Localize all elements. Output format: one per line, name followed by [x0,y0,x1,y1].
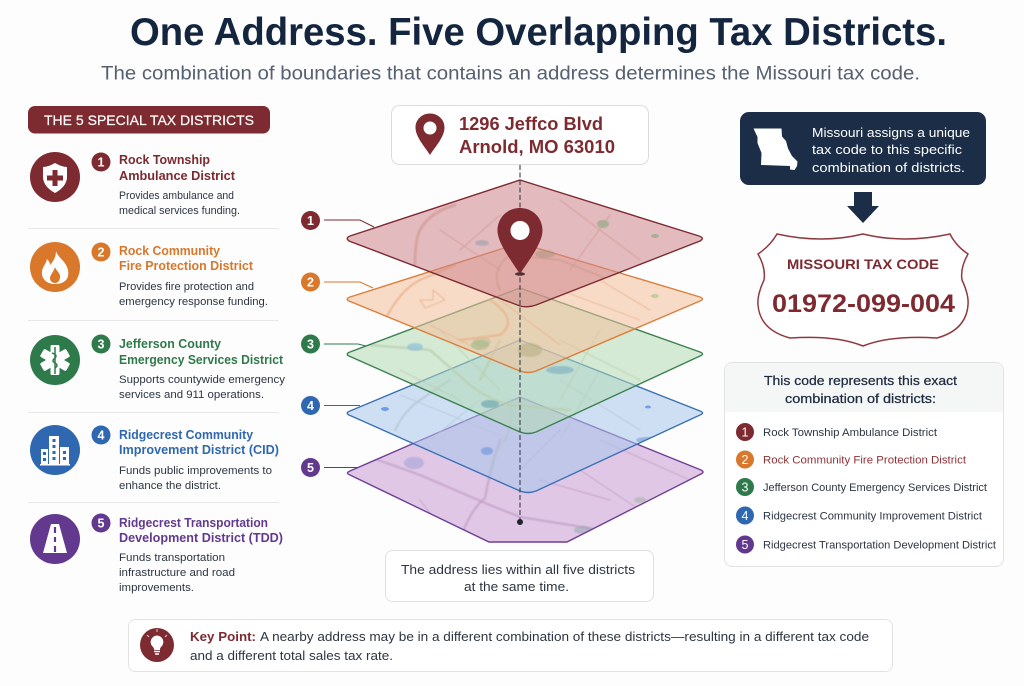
layer callout 1: 1 [307,214,314,228]
callout: Missouri assigns code: tax code to this specific [812,142,962,157]
list row 5 [736,536,996,554]
list heading: This code represents this exact [764,374,958,388]
layer 2: fire protection district [347,243,702,372]
icon: light bulb [140,628,174,662]
layer callout 4: 4 [307,399,314,413]
note: all five districts: The address lies within all five districts [401,563,635,577]
icon: Missouri outline [754,128,798,170]
subtitle: The combination of boundaries that contains an address determines the Missouri tax code. [101,62,920,84]
district 2: Rock Community [119,244,220,258]
callout: Missouri assigns code: Missouri assigns a unique [812,125,970,140]
address card [392,106,648,164]
panel: district combination list [724,362,1004,566]
key point callout [128,620,892,672]
callout: Missouri assigns code: combination of districts. [812,160,965,175]
layer callout 2 [301,272,373,292]
list row 3 [736,478,987,496]
list row 1: Rock Township Ambulance District [763,427,937,439]
tax code shield: 01972-099-004 [772,290,955,318]
panel heading [28,106,270,134]
icon: buildings [30,425,80,475]
district 1: Ambulance District [119,169,236,183]
key point callout: Key Point: [190,629,256,644]
list row 3: 3 [742,480,749,494]
district 1: Rock Township [119,153,210,167]
layer callout 1 [301,211,374,230]
district 5: 5 [98,516,105,530]
layer callout 3 [301,334,366,354]
district 2 [30,242,268,308]
district 3: 3 [98,338,105,352]
icon: fire [30,242,80,292]
layer callout 3: 3 [307,338,314,352]
district 2: 2 [98,246,105,260]
district 3: services and 911 operations. [119,389,264,401]
address text: 1296 Jeffco Blvd [459,114,603,134]
key point callout: A nearby address may be in a different combination of these districts—resulting in a different tax code [260,629,869,644]
list row 2: Rock Community Fire Protection District [763,454,966,466]
district 2: Fire Protection District [119,259,254,273]
list row 5: 5 [742,538,749,552]
list row 1 [736,423,937,441]
district 5 [30,514,283,594]
stacked district map layers [347,180,703,542]
district 3: Emergency Services District [119,353,284,367]
icon: road [30,514,80,564]
layer 4: community improvement district [347,340,702,492]
district 4: Funds public improvements to [119,465,272,477]
district 1: 1 [98,156,105,170]
district 4: enhance the district. [119,480,221,492]
list row 4 [736,506,982,524]
list row 2: 2 [742,453,749,467]
district 4: 4 [98,428,105,442]
icon: address pin [416,114,444,155]
district 1: Provides ambulance and [119,190,234,202]
layer 1: ambulance district [347,180,702,307]
layer 3: emergency services district [347,288,702,434]
layer callout 5 [301,458,358,477]
district 4: Ridgecrest Community [119,428,253,442]
panel heading: THE 5 SPECIAL TAX DISTRICTS [44,112,254,128]
district 1: medical services funding. [119,205,240,217]
list row 1: 1 [742,426,749,440]
address text: Arnold, MO 63010 [459,137,615,157]
list row 5: Ridgecrest Transportation Development District [763,540,996,552]
tax code shield: MISSOURI TAX CODE [787,257,939,273]
layer callout 4 [301,396,360,415]
district 3: Jefferson County [119,337,221,351]
district 5: infrastructure and road [119,567,235,579]
address text [459,114,615,157]
tax code shield [758,234,968,346]
district 3: Supports countywide emergency [119,374,286,386]
list row 4: Ridgecrest Community Improvement District [763,510,982,522]
district 4 [30,425,279,492]
district 1 [30,152,240,217]
district 2: Provides fire protection and [119,281,254,293]
list heading: combination of districts: [785,392,936,406]
list row 2 [736,450,966,468]
district 5: Ridgecrest Transportation [119,516,268,530]
note: all five districts [386,550,654,602]
district 2: emergency response funding. [119,296,268,308]
district 5: improvements. [119,582,194,594]
icon: ambulance shield [30,152,80,202]
title: One Address. Five Overlapping Tax Districts. [130,11,947,54]
icon: star of life [30,335,80,385]
layer 5: transportation development district [348,397,703,542]
district 5: Development District (TDD) [119,531,283,545]
layer callout 2: 2 [307,276,314,290]
layer callout 5: 5 [307,461,314,475]
dashed locator line through layers [517,165,523,525]
arrow: down to tax code [847,192,879,223]
district 5: Funds transportation [119,552,225,564]
list row 3: Jefferson County Emergency Services District [763,482,987,494]
key point callout: and a different total sales tax rate. [190,648,393,663]
list row 4: 4 [742,509,749,523]
district 4: Improvement District (CID) [119,443,279,457]
icon: map pin on stack [498,208,542,276]
note: all five districts: at the same time. [464,580,569,594]
district 3 [30,334,286,401]
list heading [725,363,1003,412]
panel: the 5 special tax districts [28,106,286,594]
callout: Missouri assigns code [740,112,986,185]
